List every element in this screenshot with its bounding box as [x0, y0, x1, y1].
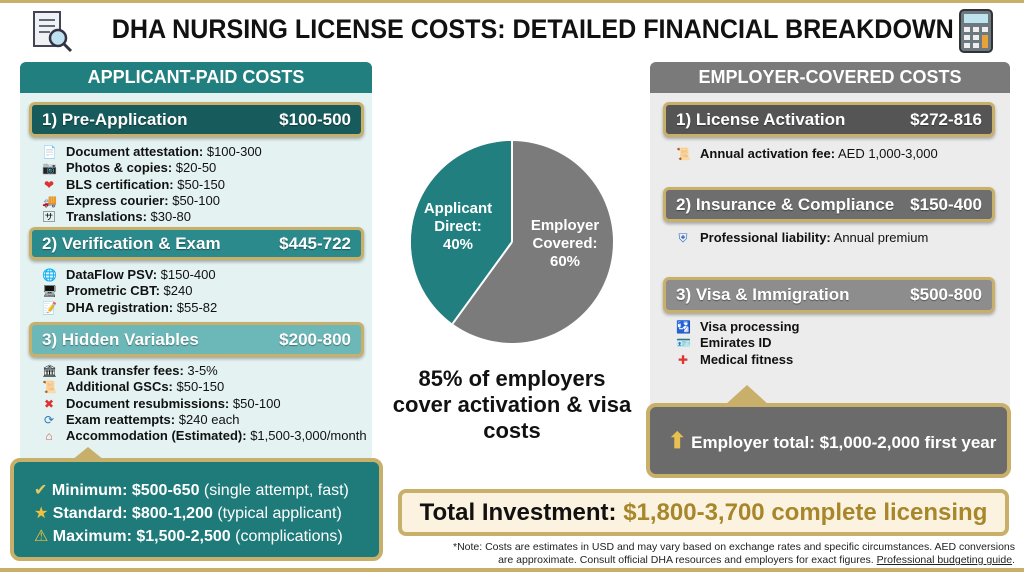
items: insurance: ⛨	[678, 231, 688, 245]
summary box: employer total	[646, 403, 1011, 478]
summary box: scenarios: ★ Standard: $800-1,200 (typical applicant)	[34, 505, 342, 522]
items: pre-application: Express courier: $50-100	[66, 193, 220, 208]
items: pre-application: Translations: $30-80	[66, 209, 191, 224]
items: insurance: Professional liability: Annual premium	[700, 230, 928, 245]
items: hidden variables: ⟳	[44, 413, 54, 427]
footnote: are approximate. Consult official DHA resources and employers for exact figures. Professional budgeting guide.	[498, 554, 1015, 566]
section bar: insurance: $150-400	[910, 194, 982, 214]
section bar: verification & exam: $445-722	[279, 234, 351, 252]
title: DHA NURSING LICENSE COSTS: DETAILED FINANCIAL BREAKDOWN	[112, 14, 954, 44]
section bar: license activation: 1) License Activation	[676, 110, 845, 128]
items: visa: Emirates ID	[700, 335, 772, 350]
panel header	[20, 62, 372, 93]
icon: document with magnifier	[33, 11, 72, 52]
top gold line	[0, 0, 1024, 3]
pie chart	[411, 141, 613, 343]
footnote: *Note: Costs are estimates in USD and may vary based on exchange rates and specific circumstances. AED conversions	[453, 541, 1015, 553]
items: license activation: 📜	[676, 147, 691, 161]
items: visa	[676, 319, 799, 367]
panel: employer-covered costs	[650, 62, 1010, 422]
bottom gold line	[0, 568, 1024, 572]
section bar: insurance	[663, 187, 995, 222]
panel header: EMPLOYER-COVERED COSTS	[698, 67, 962, 87]
section bar: pre-application: 1) Pre-Application	[42, 110, 187, 128]
notch: employer total	[725, 385, 769, 405]
section bar: pre-application: $100-500	[279, 110, 351, 128]
pie chart: Applicant	[424, 200, 492, 217]
notch: left summary	[72, 447, 104, 460]
items: verification: 📝	[42, 301, 57, 315]
section bar: verification & exam: 2) Verification & Exam	[42, 234, 221, 252]
items: visa: Visa processing	[700, 319, 799, 334]
items: verification: Prometric CBT: $240	[66, 283, 192, 298]
total investment banner	[398, 489, 1009, 536]
pie chart: 60%	[550, 253, 580, 270]
section bar: hidden variables: 3) Hidden Variables	[42, 330, 199, 348]
section bar: verification & exam	[29, 227, 364, 260]
items: pre-application: Photos & copies: $20-50	[66, 160, 216, 175]
items: visa: 🛂	[676, 320, 691, 334]
pie chart: Direct:	[434, 218, 482, 235]
items: pre-application: 🚚	[42, 194, 57, 208]
items: verification: 🖥	[42, 284, 57, 298]
items: pre-application: 📷	[42, 161, 57, 175]
items: hidden variables: Bank transfer fees: 3-5%	[66, 363, 218, 378]
callout: 85% of employers: 85% of employers cover activation & visa costs	[393, 366, 631, 443]
items: verification: DataFlow PSV: $150-400	[66, 267, 216, 282]
summary box: scenarios: ✔ Minimum: $500-650 (single attempt, fast)	[34, 482, 349, 499]
section bar: hidden variables	[29, 322, 364, 357]
items: visa: ✚	[678, 353, 688, 367]
items: pre-application: BLS certification: $50-150	[66, 177, 225, 192]
panel header: APPLICANT-PAID COSTS	[88, 67, 304, 87]
items: pre-application	[42, 144, 262, 224]
items: hidden variables: Exam reattempts: $240 each	[66, 412, 239, 427]
items: pre-application: 🈂	[43, 210, 55, 224]
panel header	[650, 62, 1010, 93]
items: visa: Medical fitness	[700, 352, 793, 367]
summary box: employer total: ⬆ Employer total: $1,000-2,000 first year	[668, 428, 996, 453]
items: hidden variables: Accommodation (Estimated): $1,500-3,000/month	[66, 428, 367, 443]
section bar: pre-application	[29, 102, 364, 137]
items: visa: 🪪	[676, 336, 691, 350]
section bar: license activation	[663, 102, 995, 137]
items: verification: DHA registration: $55-82	[66, 300, 217, 315]
pie chart: 40%	[443, 236, 473, 253]
summary box: scenarios	[10, 458, 383, 561]
pie chart: Employer	[531, 217, 599, 234]
section bar: visa	[663, 277, 995, 313]
items: pre-application: Document attestation: $100-300	[66, 144, 262, 159]
items: pre-application: 📄	[42, 145, 57, 159]
total investment banner: Total Investment: $1,800-3,700 complete licensing	[420, 499, 987, 526]
pie chart: Covered:	[532, 235, 598, 252]
items: license activation: Annual activation fee: AED 1,000-3,000	[700, 146, 938, 161]
section bar: hidden variables: $200-800	[279, 330, 351, 348]
items: verification	[42, 267, 217, 315]
panel: applicant-paid costs	[20, 62, 372, 462]
section bar: visa: 3) Visa & Immigration	[676, 285, 850, 304]
summary box: scenarios: ⚠ Maximum: $1,500-2,500 (complications)	[34, 528, 343, 545]
items: pre-application: ❤	[44, 178, 54, 192]
items: hidden variables: 🏛	[42, 364, 57, 378]
items: verification: 🌐	[42, 268, 57, 282]
footnote	[453, 541, 1015, 566]
items: hidden variables	[42, 363, 367, 443]
items: hidden variables: Document resubmissions: $50-100	[66, 396, 281, 411]
items: hidden variables: Additional GSCs: $50-150	[66, 379, 224, 394]
items: hidden variables: 📜	[42, 380, 57, 394]
items: hidden variables: ✖	[44, 397, 54, 411]
section bar: insurance: 2) Insurance & Compliance	[676, 194, 894, 214]
icon: calculator	[959, 9, 993, 53]
section bar: visa: $500-800	[910, 285, 982, 304]
section bar: license activation: $272-816	[910, 110, 982, 128]
items: hidden variables: ⌂	[45, 429, 53, 443]
